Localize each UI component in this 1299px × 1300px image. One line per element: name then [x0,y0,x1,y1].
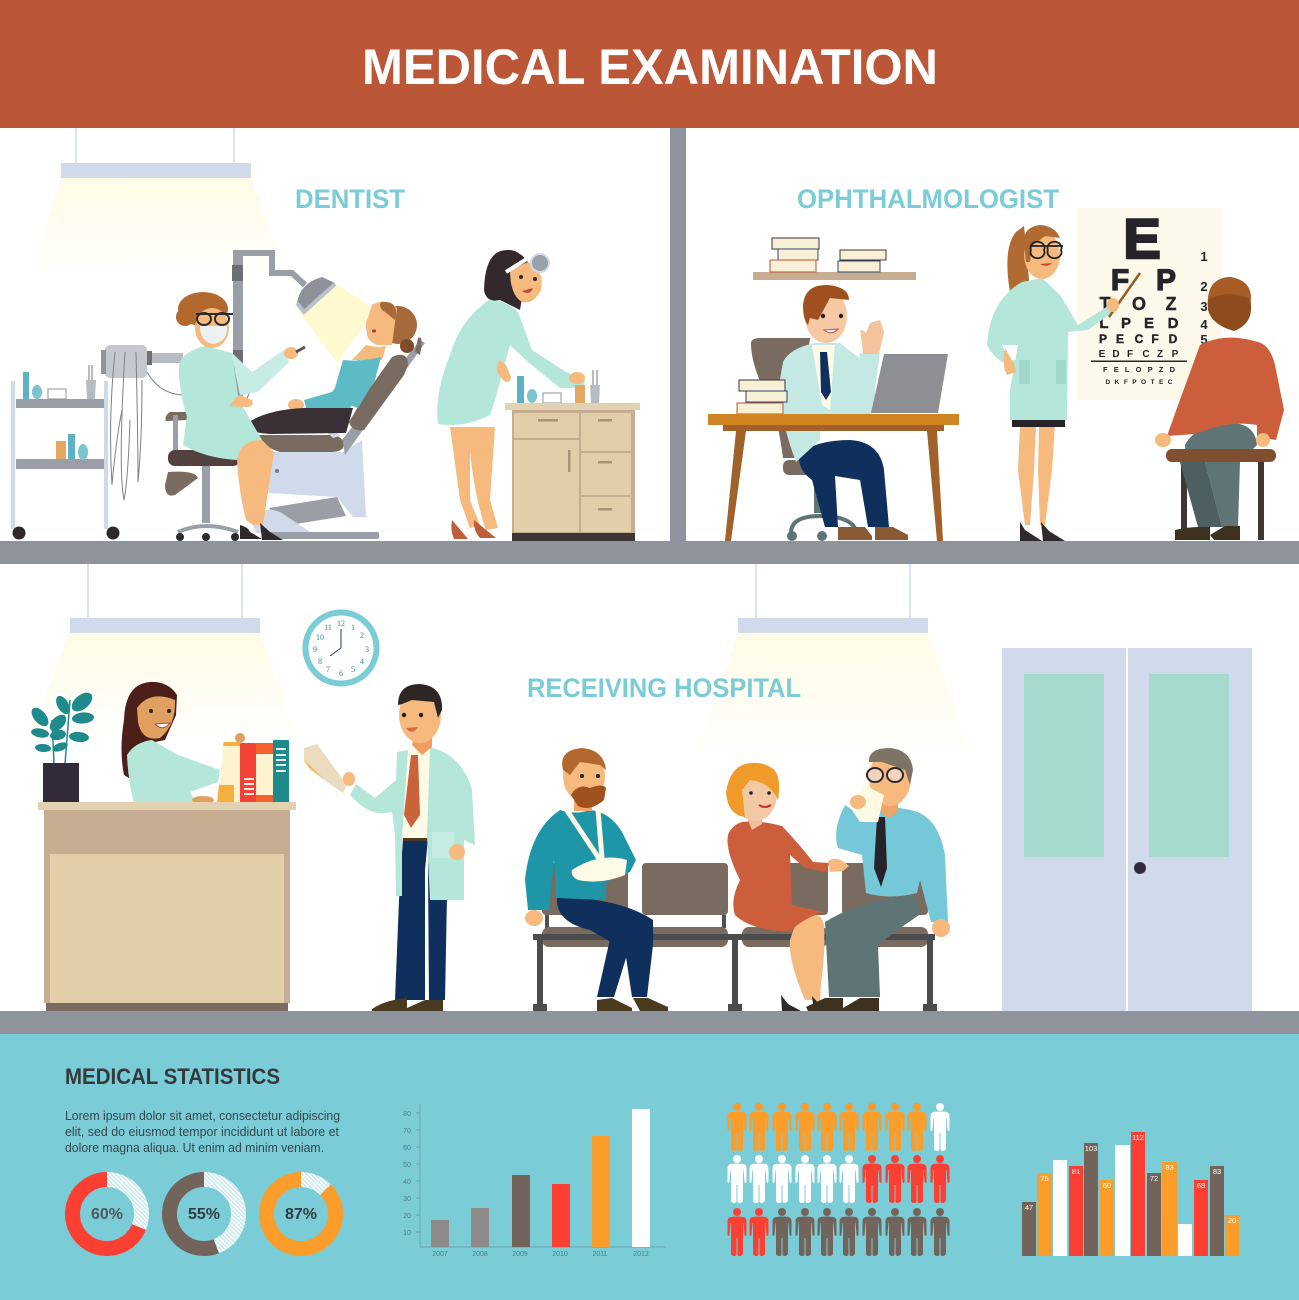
labelled column chart: 75 [1040,1174,1049,1183]
bar chart: yearly values: 20 [403,1213,411,1220]
donut chart: 87% [266,1180,336,1248]
wall clock: 8 [318,657,322,666]
bar chart: yearly values: 80 [403,1111,411,1118]
double door [1002,648,1252,1011]
wall clock: 9 [313,645,317,654]
wall clock: 7 [326,665,330,674]
bar chart: yearly values: 30 [403,1196,411,1203]
eye chart [1078,207,1222,400]
dentist figure [176,292,305,540]
donut chart: 87%: 87% [285,1206,317,1223]
ceiling lamp: reception [25,564,300,745]
floor: lower room [0,1011,1299,1034]
eye chart: L [1099,315,1109,332]
waiting room chairs [533,863,937,1011]
eye chart: P [1172,349,1179,360]
patient woman in red dress [726,763,849,1011]
labelled column chart: 112 [1132,1133,1144,1142]
eye chart: C [1142,349,1150,360]
ophthalmologist nurse [987,225,1140,541]
eye chart: DKFPOTEC [1106,379,1173,386]
bar chart: yearly values: 40 [403,1179,411,1186]
body text [65,1108,340,1155]
potted plant [28,689,96,802]
labelled column chart: 81 [1072,1167,1080,1176]
instrument cart [11,365,120,540]
body text: elit, sed do eiusmod tempor incididunt ut labore et [65,1124,339,1139]
doctor at desk [779,285,908,540]
dental lamp on pillar [232,250,375,425]
wall clock: 1 [351,623,355,632]
patient man with tissue [806,748,950,1011]
statistics panel background [0,1034,1299,1300]
bar chart: yearly values: 2012 [633,1251,649,1258]
eye chart: 3 [1200,299,1208,314]
floor: upper rooms [0,541,1299,564]
wall clock: 3 [365,645,369,654]
eye chart: T [1100,294,1110,314]
eye chart: O [1132,294,1146,314]
labelled column chart: 83 [1165,1163,1174,1172]
bar chart: yearly values: 2011 [592,1251,608,1258]
wall clock: 12 [337,619,345,628]
people pictogram: row 1 [728,1103,950,1151]
laptop [871,354,948,413]
heading: dentist: DENTIST [295,184,405,214]
dentist stool [165,412,240,541]
eye chart: E [1123,207,1161,270]
medical cabinet [505,370,640,541]
labelled column chart: 72 [1150,1174,1158,1183]
dental unit with hoses [101,345,285,500]
bar chart: yearly values: 50 [403,1162,411,1169]
bar chart: yearly values: 10 [403,1230,411,1237]
eye chart: F [1111,264,1129,297]
bar chart: yearly values: 2007 [432,1251,448,1258]
patient with arm sling [525,748,668,1011]
wall clock: 4 [360,657,364,666]
heading: ophthalmologist: OPHTHALMOLOGIST [797,184,1059,214]
ceiling lamp: waiting area [690,564,975,768]
labelled column chart: 83 [1213,1167,1221,1176]
bar chart: yearly values: 2010 [552,1251,568,1258]
eye chart: FELOPZD [1103,365,1176,374]
labelled column chart [1022,1132,1239,1256]
eye chart: 4 [1200,317,1208,332]
labelled column chart: 47 [1025,1203,1033,1212]
header banner [0,0,1299,128]
wall clock: 2 [360,631,364,640]
heading: medical statistics: MEDICAL STATISTICS [65,1064,280,1089]
eye chart: C [1135,332,1144,346]
bar chart: yearly values: 60 [403,1145,411,1152]
donut chart: 60%: 60% [91,1206,123,1223]
donut chart: 55%: 55% [188,1206,220,1223]
eye chart: 5 [1200,332,1208,347]
eye chart: D [1168,315,1179,332]
bar chart: yearly values: 2008 [472,1251,488,1258]
eye chart: E [1144,315,1154,332]
eye chart: F [1151,332,1159,346]
eye chart: 1 [1200,249,1208,264]
donut chart: 60% [72,1180,142,1248]
reception desk [38,802,296,1011]
wall clock: 11 [324,623,332,632]
body text: Lorem ipsum dolor sit amet, consectetur adipiscing [65,1108,340,1123]
eye chart: D [1169,332,1178,346]
wall clock [306,612,376,684]
dental chair [251,337,425,539]
eye chart: F [1127,349,1133,360]
eye chart: 2 [1200,279,1208,294]
eye chart: P [1156,264,1176,297]
eye chart: P [1121,315,1131,332]
desk [708,414,959,541]
wall clock: 6 [339,669,343,678]
people pictogram: row 3 [728,1208,950,1256]
title: MEDICAL EXAMINATION [362,39,938,95]
labelled column chart: 60 [1103,1181,1111,1190]
people pictogram: row 2 [728,1155,950,1203]
labelled column chart: 20 [1228,1216,1236,1225]
body text: dolore magna aliqua. Ut enim ad minim veniam. [65,1140,324,1155]
bar chart: yearly values: 70 [403,1128,411,1135]
wall clock: 5 [351,665,355,674]
receiving doctor [304,684,475,1011]
eye chart: Z [1157,349,1163,360]
receptionist [122,682,245,804]
eye chart: E [1099,349,1106,360]
donut chart: 55% [170,1180,238,1248]
ceiling lamp: dentist room [28,128,290,285]
seated eye patient [1155,277,1284,540]
desk books [737,380,787,414]
eye chart: Z [1166,294,1176,314]
nurse with head mirror [437,250,585,539]
bar chart: yearly values: 2009 [512,1251,528,1258]
wall clock: 10 [316,633,324,642]
heading: receiving hospital: RECEIVING HOSPITAL [527,673,801,703]
eye chart: D [1112,349,1120,360]
wall shelf with books [753,238,916,280]
wall divider [670,128,686,543]
labelled column chart: 68 [1197,1181,1205,1190]
office chair [751,338,865,541]
patient in chair [244,302,417,434]
bar chart: yearly values [403,1104,666,1258]
labelled column chart: 103 [1085,1144,1097,1153]
eye chart: E [1116,332,1124,346]
eye chart: P [1099,332,1107,346]
folders [217,740,289,804]
